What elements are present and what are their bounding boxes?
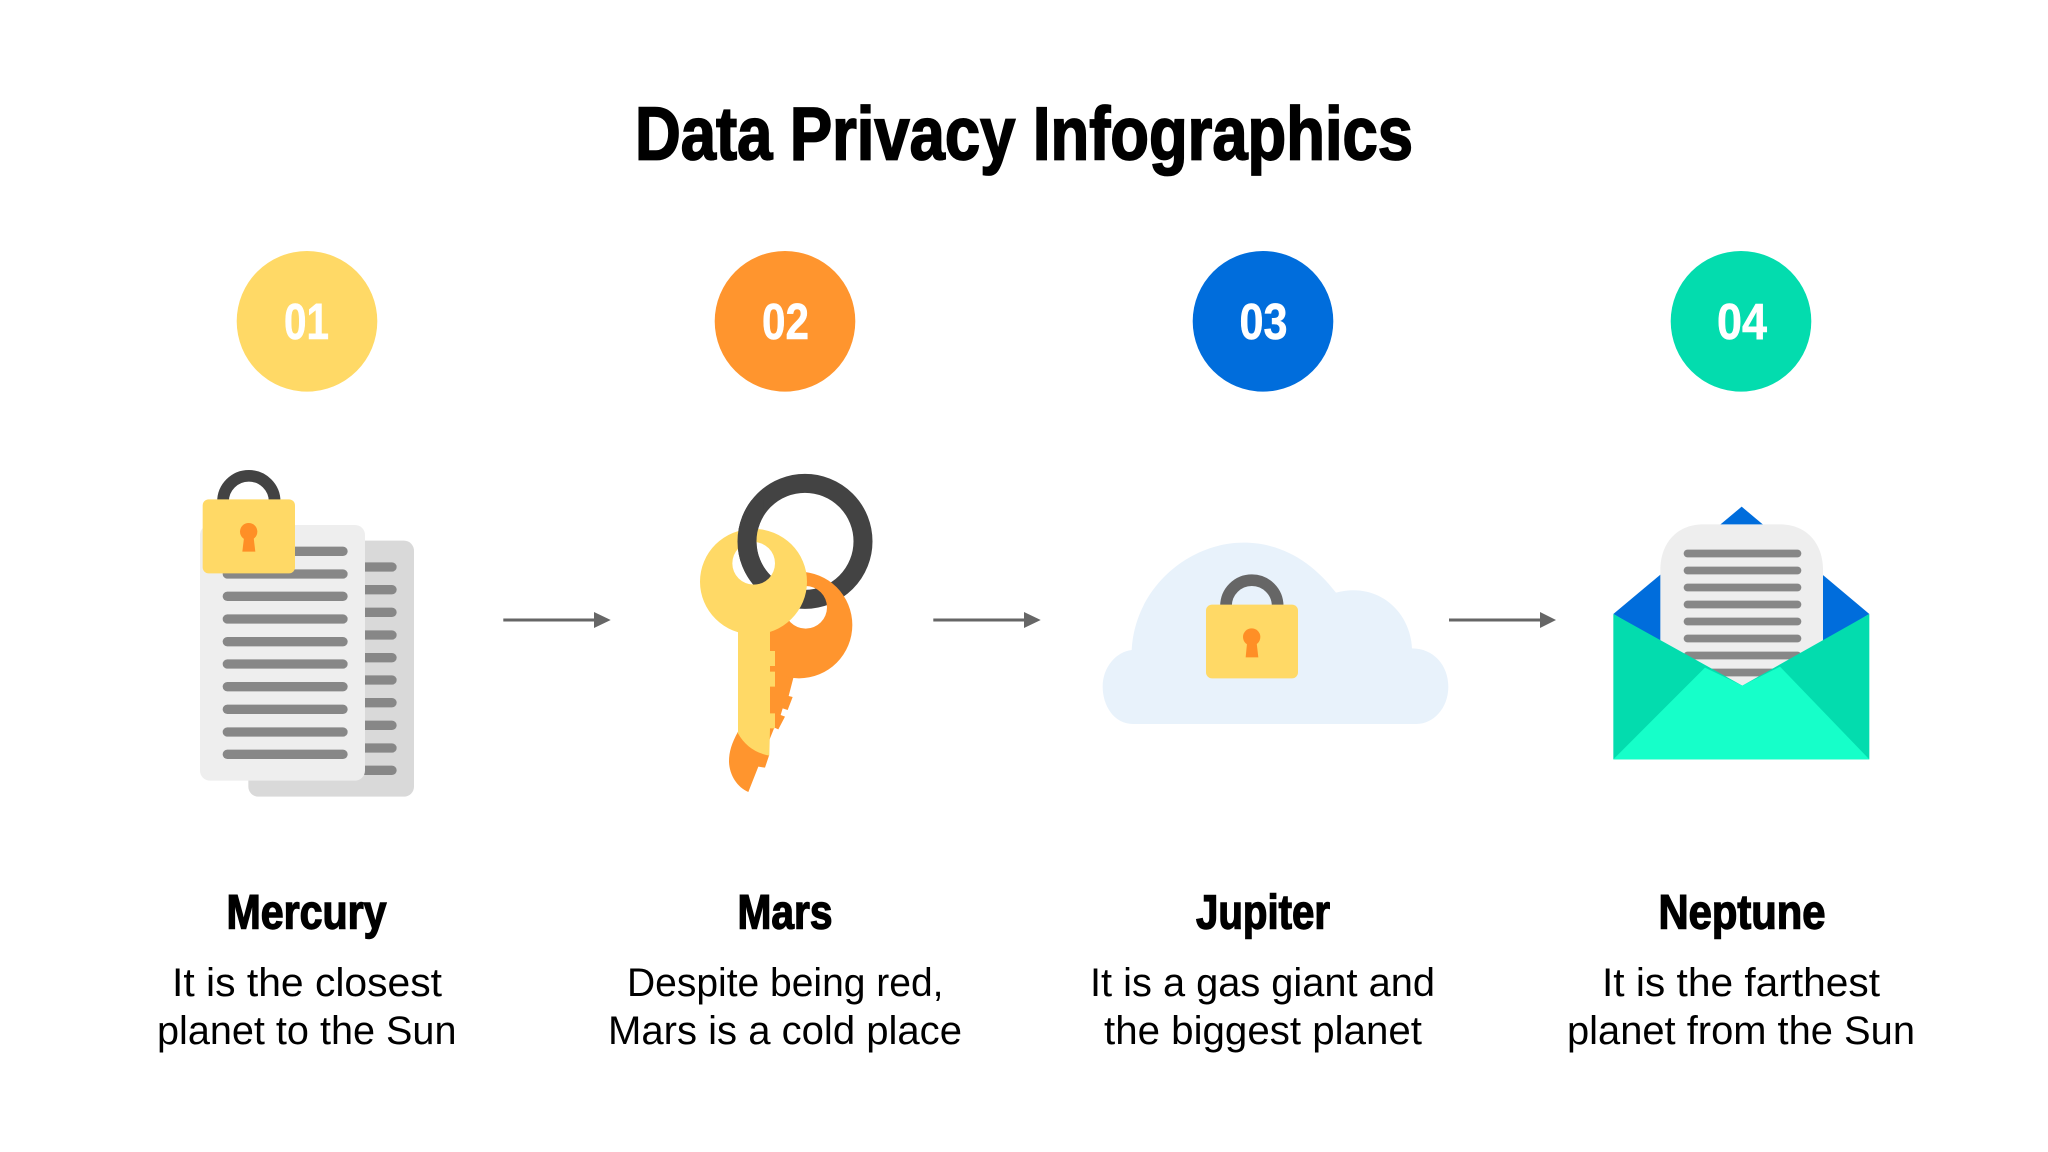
panel: Jupiter text [1090,886,1435,1053]
panel: Mercury text: planet to the Sun [157,1009,456,1053]
arrow: step 2 to 3 [933,612,1041,628]
panel: Mars text: Mars [738,886,832,940]
icon: locked documents [200,476,414,797]
step badge 04 [1671,251,1811,392]
panel: Mercury text [157,886,456,1053]
step badge 03: 03 [1240,293,1288,350]
panel: Mars text: Despite being red, [627,961,944,1005]
icon: open envelope with letter [1613,507,1869,759]
panel: Mars text [608,886,962,1053]
step badge 02: 02 [762,293,809,350]
arrow: step 3 to 4 [1449,612,1556,628]
panel: Mars text: Mars is a cold place [608,1009,962,1053]
step badge 02 [715,251,855,392]
icon: keys on ring [700,483,863,792]
infographic canvas [160,104,1912,1052]
step badge 01 [237,251,377,392]
step badge 01: 01 [284,293,329,350]
icon: cloud with padlock [1103,543,1448,724]
step badge 04: 04 [1717,293,1768,350]
panel: Mercury text: Mercury [226,886,387,940]
panel: Neptune text: Neptune [1658,886,1826,940]
panel: Jupiter text: Jupiter [1196,886,1330,940]
panel: Neptune text: It is the farthest [1602,961,1880,1005]
title: Data Privacy Infographics [635,92,1413,176]
panel: Neptune text [1567,886,1915,1053]
panel: Mercury text: It is the closest [172,961,442,1005]
panel: Jupiter text: the biggest planet [1104,1009,1422,1053]
arrow: step 1 to 2 [503,612,611,628]
panel: Jupiter text: It is a gas giant and [1090,961,1435,1005]
step badge 03 [1193,251,1333,392]
panel: Neptune text: planet from the Sun [1567,1009,1915,1053]
